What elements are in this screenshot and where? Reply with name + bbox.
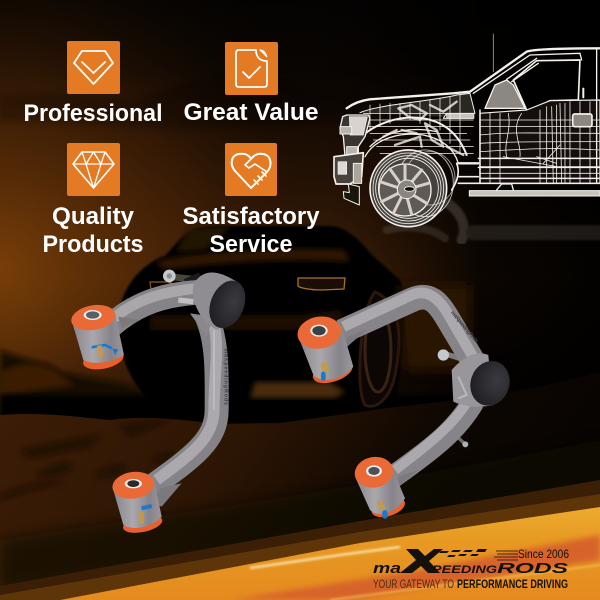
heading: Professional: Professional: [24, 100, 162, 127]
logo: maXpeedingRods: [373, 547, 569, 591]
icon: satisfactory service handshake heart: [225, 143, 277, 196]
left arm: bottom grease fitting: [138, 506, 152, 524]
logo: tagline bold: PERFORMANCE DRIVING: [457, 579, 568, 591]
right arm: ball joint studs: [438, 349, 468, 447]
logo: since 2006: Since 2006: [518, 547, 569, 561]
right arm: black cup: [452, 353, 515, 411]
right arm: weld gusset: [332, 328, 418, 487]
logo: big X: [400, 549, 443, 573]
icon: quality diamond: [67, 143, 120, 196]
logo: ma wordmark: ma: [373, 560, 401, 577]
wireframe truck: [334, 34, 600, 240]
wireframe sill bar: [469, 191, 600, 196]
icon: professional badge: [67, 41, 120, 94]
heading: Satisfactory Service: [182, 203, 320, 258]
wireframe door grid: [480, 102, 600, 183]
heading: Satisfactory Service: Service: [210, 231, 292, 258]
wireframe door handle: [573, 114, 592, 127]
heading: Quality Products: [42, 203, 144, 258]
left arm: top bushing: [69, 302, 125, 373]
wireframe front wheel: [370, 150, 455, 227]
heading: Great Value: Great Value: [184, 99, 318, 126]
left arm: bottom bushing: [111, 469, 164, 536]
wireframe body panel fill: [480, 100, 600, 183]
left arm: small bolt: [178, 300, 193, 302]
right arm: bottom grease fitting: [377, 501, 386, 516]
left control arm: [69, 270, 252, 536]
background: dark truck silhouette: [118, 226, 470, 406]
left arm: brand mark on tube: maXpeedingRods: [222, 348, 228, 405]
right arm: main tube: [342, 293, 478, 477]
left arm: black cup: [193, 272, 252, 333]
left arm: main tube: [112, 287, 217, 487]
right arm: bottom bushing: [352, 454, 407, 521]
wireframe headlight and grille: [340, 115, 370, 156]
left arm: weld gussets: [118, 317, 182, 507]
background: desert dunes: [0, 372, 600, 590]
wireframe reflection: [387, 202, 600, 240]
heading: Satisfactory Service: Satisfactory: [182, 203, 320, 230]
right arm: top grease fitting: [321, 362, 329, 378]
icon: great value document: [225, 42, 278, 95]
wireframe wheel arch: [358, 118, 467, 155]
wireframe cab window: [513, 60, 580, 110]
left arm: top grease fitting: [92, 345, 118, 357]
left arm: ball joint stud: [163, 270, 200, 282]
heading: Quality Products: Products: [42, 231, 144, 258]
background: orange light streak band: [0, 480, 600, 600]
logo: checkered flag: [439, 549, 487, 557]
right arm: top bushing: [295, 313, 355, 388]
wireframe roof and hood outline: [347, 48, 600, 108]
wireframe hood details: [360, 93, 475, 118]
logo: peeding wordmark: PEEDING: [432, 564, 498, 576]
right arm: brand mark on tube: maXpeedingRods: [449, 310, 479, 345]
logo: speed lines: [494, 551, 518, 560]
heading: Quality Products: Quality: [52, 203, 135, 230]
logo: rods wordmark: RODS: [497, 560, 568, 577]
logo: tagline: YOUR GATEWAY TO: [373, 579, 454, 591]
wireframe mirror: [485, 80, 525, 108]
right control arm: [295, 293, 515, 521]
